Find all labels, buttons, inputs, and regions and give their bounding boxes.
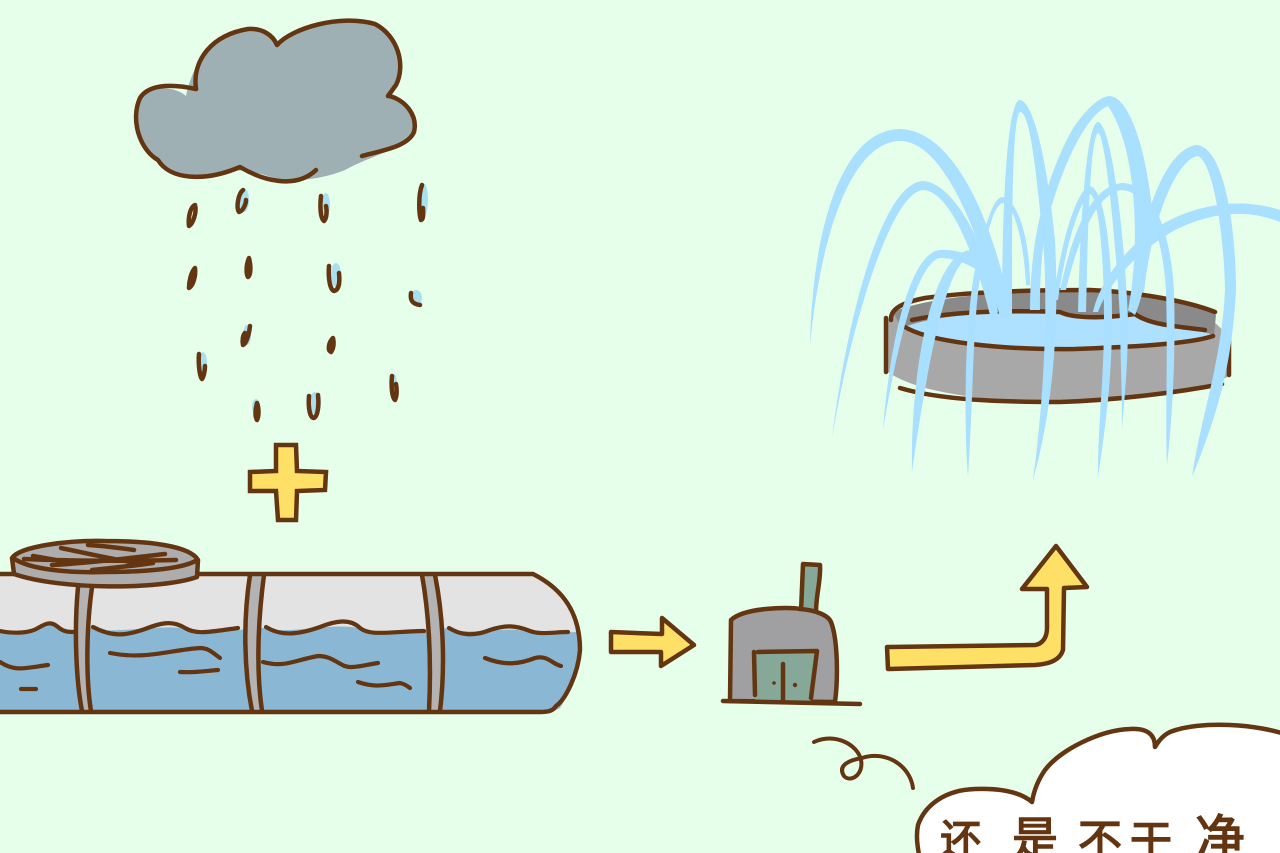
pool water — [905, 312, 1215, 350]
pipe — [0, 574, 580, 712]
thought squiggle — [814, 738, 913, 788]
pipe body air — [0, 574, 580, 712]
pool outer wall — [888, 291, 1229, 402]
arrow: pump house to fountain — [887, 546, 1087, 669]
fountain pool — [886, 290, 1229, 402]
pump house — [723, 564, 860, 704]
ground line — [723, 701, 860, 704]
building body — [730, 608, 837, 702]
bubble outline — [917, 725, 1280, 853]
pool inner wall — [893, 291, 1216, 335]
arrow: pipe to pump house — [611, 618, 694, 666]
icon: rain cloud — [136, 21, 415, 181]
fountain water arcs — [810, 96, 1280, 480]
pipe bands — [76, 575, 443, 712]
bubble text — [940, 811, 1245, 853]
manhole cover — [12, 541, 198, 586]
water waves — [0, 621, 568, 689]
speech bubble — [917, 725, 1280, 853]
icon: plus sign — [250, 445, 326, 520]
door — [754, 651, 817, 701]
pipe water — [0, 625, 578, 712]
pool rim outlines — [886, 290, 1229, 375]
chimney — [801, 564, 820, 612]
raindrops — [189, 184, 428, 420]
pipe outline — [0, 574, 580, 712]
